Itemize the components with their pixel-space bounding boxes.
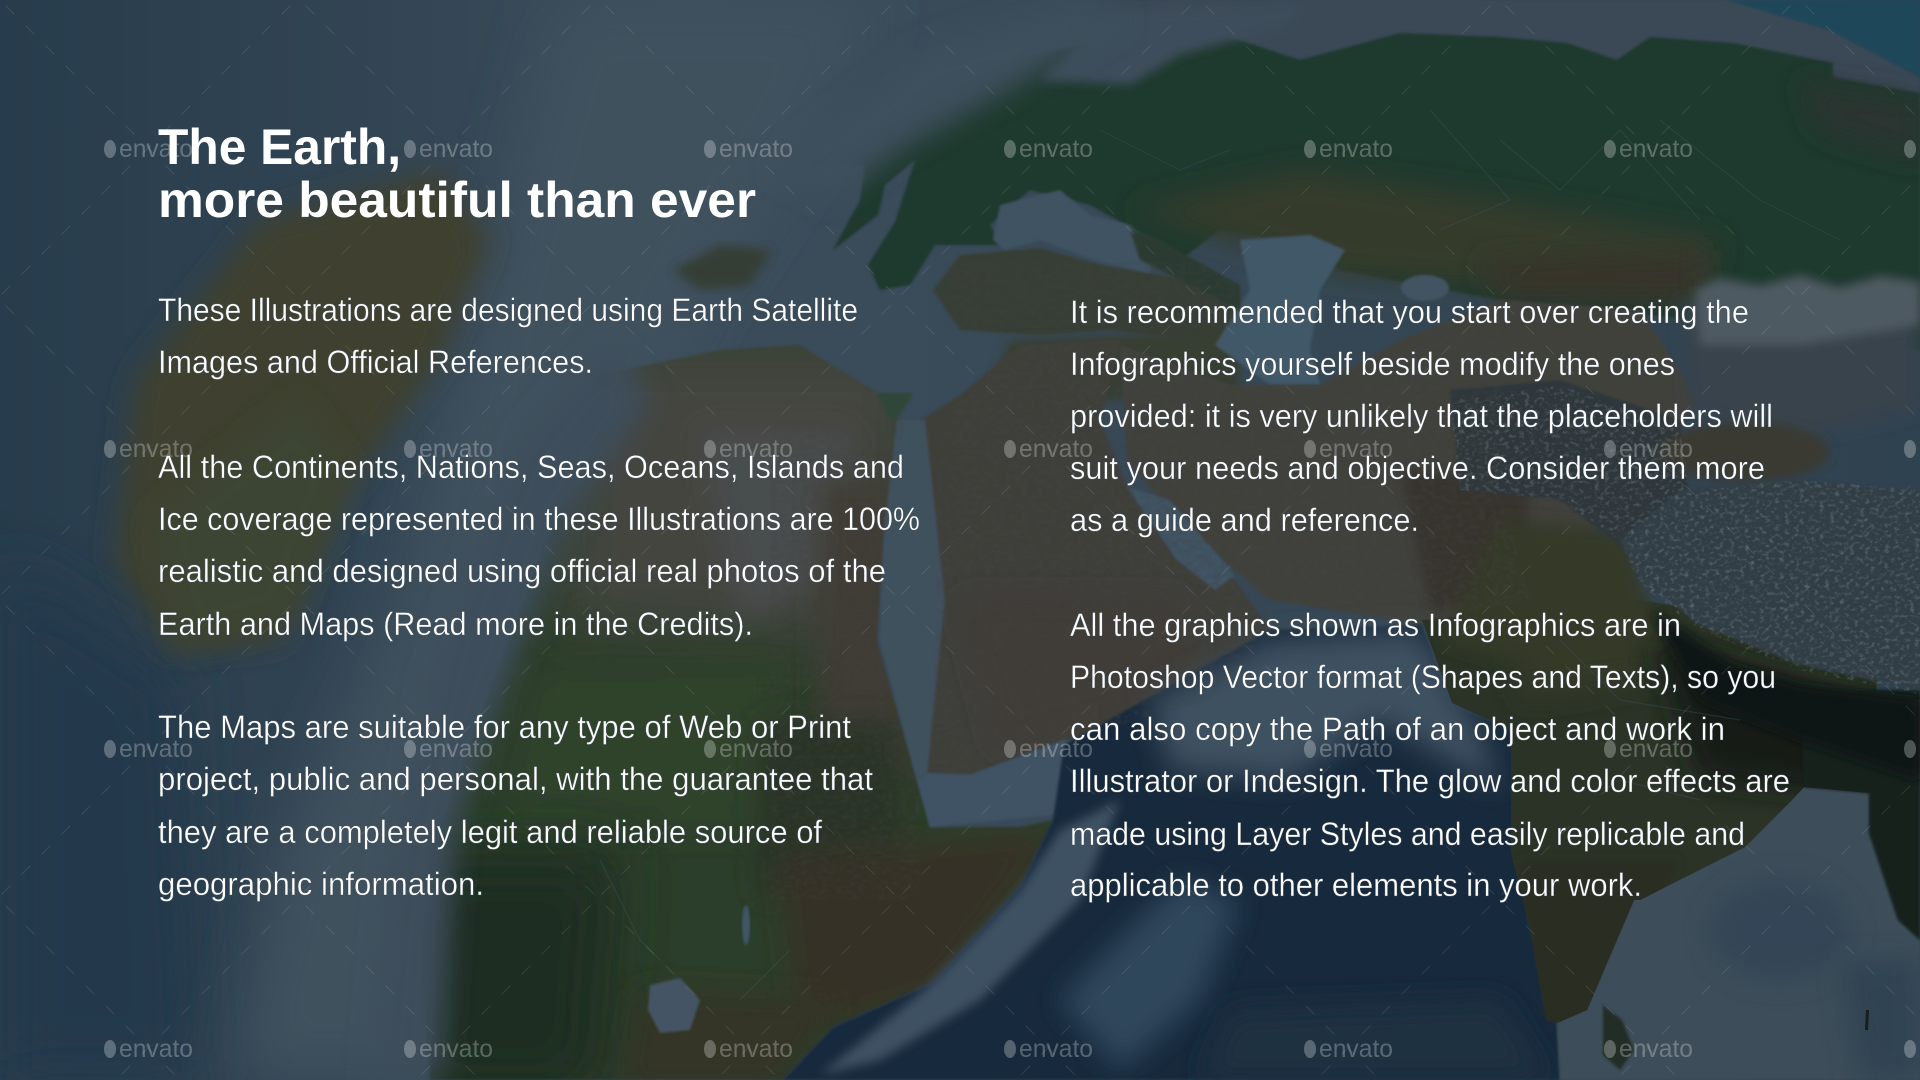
- coastal browns: [820, 480, 915, 770]
- envato watermarks: envato: [1019, 435, 1093, 463]
- paragraph: continents and nations: Ice coverage represented in these Illustrations are 100%: [158, 501, 920, 537]
- envato watermarks: envato: [1619, 1035, 1693, 1063]
- Afghan ranges: [1400, 470, 1530, 610]
- India: [1422, 600, 1877, 1023]
- olive haze, green lower end: [150, 400, 350, 650]
- envato watermarks: envato: [119, 735, 193, 763]
- Sri Lanka: [1603, 1005, 1634, 1070]
- Horn red brown: [789, 840, 1034, 1013]
- atlantic cloud band: [230, 0, 880, 1080]
- Bay of Bengal darker: [1710, 880, 1850, 980]
- envato watermarks: envato: [419, 135, 493, 163]
- polar ice: [1000, 0, 1920, 110]
- paragraph: recommendation: [1070, 294, 1773, 538]
- paragraph: suitable maps: project, public and personal, with the guarantee that: [158, 761, 873, 797]
- paragraph: suitable maps: [158, 709, 873, 902]
- cloud fade along west African coast: [370, 340, 650, 1080]
- envato watermarks: envato: [1619, 735, 1693, 763]
- paragraph: recommendation: It is recommended that you start over creating the: [1070, 294, 1749, 330]
- title: more beautiful than ever: [158, 172, 756, 228]
- terrain texture: Turkey: [945, 262, 1235, 328]
- Himalaya shadow band: [1650, 610, 1920, 780]
- text block: right column: [1070, 294, 1790, 903]
- Iran and Afghanistan: [1120, 300, 1700, 625]
- envato watermarks: envato: [419, 435, 493, 463]
- Sahara greys: [560, 340, 920, 640]
- Tibet plateau: [1620, 480, 1920, 690]
- envato watermarks: envato: [1619, 435, 1693, 463]
- paragraph: vector format: applicable to other elements in your work.: [1070, 867, 1642, 903]
- paragraph: satellite images: [158, 292, 858, 380]
- Lake Turkana: [742, 905, 750, 945]
- western Europe islands: [673, 245, 772, 290]
- rivers: [600, 110, 1840, 1000]
- space and atmosphere, top right: [1727, 0, 1920, 77]
- bright cloud edge: [1695, 275, 1920, 345]
- cloud fade over western Europe: [770, 0, 1130, 200]
- paragraph: suitable maps: The Maps are suitable for any type of Web or Print: [158, 709, 851, 745]
- Levant and Iraq: [980, 330, 1240, 410]
- paragraph: continents and nations: Earth and Maps (Read more in the Credits).: [158, 606, 753, 642]
- Andaman islands: [1865, 1010, 1869, 1030]
- paragraph: vector format: made using Layer Styles and easily replicable and: [1070, 816, 1745, 852]
- Nile delta: [877, 393, 913, 420]
- Bay of Bengal: [1557, 787, 1920, 1080]
- land mass: Scandinavia and Russia: [810, 33, 1920, 350]
- Bay of Bengal east: [1840, 960, 1920, 1080]
- Arabia interior browns: [960, 600, 1200, 750]
- Ganges plain: [1650, 640, 1880, 800]
- south India: [1528, 886, 1666, 1023]
- Sahel green: [500, 670, 780, 830]
- Karakoram and Hindu Kush: [1450, 380, 1690, 560]
- title: [158, 119, 756, 228]
- Siberia greyish east: [1800, 80, 1920, 160]
- envato watermarks: envato: [719, 435, 793, 463]
- paragraph: satellite images: Images and Official References.: [158, 344, 593, 380]
- Aral Sea: [1401, 275, 1449, 301]
- paragraph: recommendation: provided: it is very unlikely that the placeholders will: [1070, 398, 1773, 434]
- Congo dark forest: [434, 843, 625, 1080]
- paragraph: vector format: All the graphics shown as Infographics are in: [1070, 607, 1681, 643]
- envato watermarks: envato: [1319, 1035, 1393, 1063]
- Indus basin and Punjab: [1440, 520, 1660, 660]
- Arabian Sea top slate: [1150, 630, 1500, 790]
- paragraph: continents and nations: All the Continents, Nations, Seas, Oceans, Islands and: [158, 449, 904, 485]
- Lake Victoria: [648, 978, 700, 1033]
- paragraph: recommendation: Infographics yourself beside modify the ones: [1070, 346, 1675, 382]
- text block: left column: [158, 292, 920, 902]
- northern Europe ice and lakes: [1040, 5, 1300, 85]
- clouds over Mongolia and China: [1680, 290, 1920, 440]
- envato watermarks: envato: [119, 435, 193, 463]
- brown steppe: [1480, 250, 1700, 300]
- cloud streak, central Arabian Sea: [1060, 880, 1240, 1070]
- olive steppe: [1130, 170, 1720, 300]
- paragraph: continents and nations: [158, 449, 920, 642]
- envato watermarks: envato: [1319, 435, 1393, 463]
- Caucasus: [1130, 230, 1240, 310]
- paragraph: satellite images: These Illustrations are designed using Earth Satellite: [158, 292, 858, 328]
- envato watermarks: envato: [1619, 135, 1693, 163]
- Tarim desert: [1660, 422, 1830, 482]
- envato watermarks: envato: [1019, 1035, 1093, 1063]
- envato watermarks: envato: [119, 1035, 193, 1063]
- terrain texture: Africa: [786, 716, 912, 898]
- envato watermarks: envato: [719, 1035, 793, 1063]
- title: The Earth,: [158, 119, 401, 175]
- cloud along Somali coast: [820, 800, 1120, 1075]
- Burma and southeast Asia: [1800, 690, 1920, 940]
- Sahara clouds: [706, 430, 852, 614]
- envato watermarks: envato: [1319, 735, 1393, 763]
- lower Arabian Sea: [1200, 1000, 1550, 1080]
- envato watermarks: envato: [719, 135, 793, 163]
- Indus plain: [1526, 650, 1642, 688]
- Black Sea: [993, 190, 1153, 273]
- paragraph: recommendation: as a guide and reference.: [1070, 502, 1419, 538]
- atlantic dark ocean, lower left: [0, 560, 200, 1080]
- envato watermarks: envato: [419, 1035, 493, 1063]
- paragraph: suitable maps: they are a completely legit and reliable source of: [158, 814, 822, 850]
- Red Sea: [880, 420, 945, 780]
- Ethiopian highlands: [760, 720, 900, 900]
- olive haze over the atlantic: [115, 170, 490, 650]
- Arabian Sea: [783, 625, 1560, 1080]
- terrain texture: Tibet: [1450, 385, 1920, 700]
- envato watermarks: envato: [719, 735, 793, 763]
- Caspian Sea: [1215, 235, 1345, 385]
- paragraph: continents and nations: realistic and designed using official real photos of the: [158, 553, 886, 589]
- paragraph: vector format: [1070, 607, 1790, 903]
- paragraph: vector format: can also copy the Path of an object and work in: [1070, 711, 1725, 747]
- Persian Gulf: [1127, 487, 1235, 590]
- terrain texture: Middle East: [930, 438, 1522, 729]
- Gulf of Aden: [917, 740, 1120, 827]
- Turkey: [933, 248, 1240, 345]
- envato watermarks: envato: [119, 135, 193, 163]
- envato watermarks: envato: [419, 735, 493, 763]
- Africa: [428, 344, 1052, 1080]
- paragraph: vector format: Illustrator or Indesign. The glow and color effects are: [1070, 763, 1790, 799]
- Arabian peninsula: [905, 340, 1270, 775]
- envato watermarks: envato: [1019, 735, 1093, 763]
- envato watermarks: envato: [1019, 135, 1093, 163]
- paragraph: vector format: Photoshop Vector format (Shapes and Texts), so you: [1070, 659, 1776, 695]
- east Africa olive: [630, 1002, 801, 1079]
- paragraph: recommendation: suit your needs and objective. Consider them more: [1070, 450, 1765, 486]
- paragraph: suitable maps: geographic information.: [158, 866, 484, 902]
- envato watermarks: envato: [1319, 135, 1393, 163]
